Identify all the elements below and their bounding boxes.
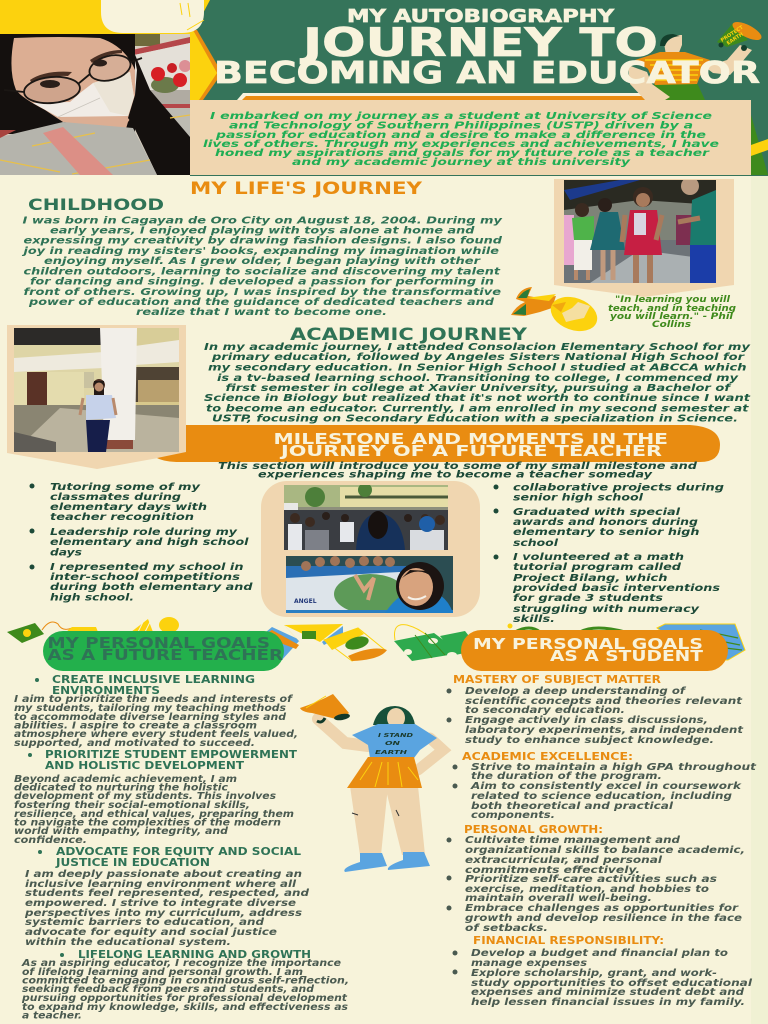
intro panel: passion for education and a desire to make a difference in the [215, 130, 706, 141]
illustration: woman with megaphone [300, 694, 443, 872]
section: personal growth: exercise, meditation, and hobbies to [465, 884, 709, 895]
icon: cutlery [131, 617, 179, 633]
section: teacher goal 3: perspectives into my curriculum, address [24, 908, 302, 919]
section: personal growth: Cultivate time management and [465, 835, 681, 846]
intro panel [190, 100, 751, 175]
section: financial responsibility: Develop a budget and financial plan to [471, 948, 728, 959]
section: teacher goal 1: my students, tailoring my teaching methods [14, 703, 286, 714]
section: academic excellence [452, 750, 757, 821]
quote [608, 295, 737, 330]
photo frame: childhood [554, 177, 734, 297]
title: becoming an educator: BECOMING AN EDUCATOR [214, 56, 760, 91]
section: academic excellence: ACADEMIC EXCELLENCE: [462, 750, 633, 763]
section: mastery of subject matter: Develop a deep understanding of [465, 686, 687, 697]
photo: student crowd [284, 483, 448, 550]
illustration: man with megaphone [628, 18, 764, 100]
section: teacher goal 4: committed to engaging in continuous self-reflection, [22, 976, 349, 986]
list: milestones right: provided basic interventions [512, 583, 720, 594]
panel: goals as a future teacher heading: MY PERSONAL GOALS [48, 634, 270, 652]
section: financial responsibility [452, 934, 753, 1008]
intro panel: I embarked on my journey as a student at University of Science [210, 111, 712, 122]
quote: you will learn." - Phil [610, 312, 734, 322]
quote: Collins [652, 320, 692, 330]
heading: my life's journey: MY LIFE'S JOURNEY [190, 179, 423, 199]
text block: academic journey: to become an educator. Currently, I am enrolled in my second semester at [206, 404, 750, 414]
banner: milestones [157, 425, 720, 462]
banner: milestones: JOURNEY OF A FUTURE TEACHER [280, 442, 663, 460]
section: teacher goal 2: PRIORITIZE STUDENT EMPOWERMENT [45, 748, 298, 761]
section: teacher goal 2: fostering their social-emotional skills, [14, 800, 250, 811]
illustration: woman with megaphone: ON [385, 741, 401, 747]
section: academic excellence: both theoretical and practical [471, 801, 674, 812]
section: teacher goal 3: I am deeply passionate about creating an [25, 869, 302, 880]
list: milestones left [30, 482, 254, 604]
text block: childhood: I was born in Cagayan de Oro City on August 18, 2004. During my [22, 216, 503, 226]
section: personal growth: growth and develop resilience in the face [465, 913, 742, 924]
section: teacher goal 4: to expand my knowledge, skills, and effectiveness as [22, 1002, 348, 1013]
section: teacher goal 3: advocate for equity and social justice [25, 927, 277, 938]
list: milestones right: Graduated with special [513, 507, 681, 518]
heading: academic journey: ACADEMIC JOURNEY [290, 325, 528, 345]
icon: open package [284, 624, 343, 645]
icon: green tote bags [394, 624, 625, 661]
section: mastery of subject matter: MASTERY OF SUBJECT MATTER [453, 673, 662, 686]
section: teacher goal 3: students feel represented, respected, and [25, 888, 310, 899]
quote: "In learning you will [615, 295, 731, 305]
list: milestones left: classmates during [50, 492, 181, 503]
intro panel: and Technology of Southern Philippines (USTP) driven by a [229, 120, 693, 132]
text block: childhood: enjoying myself. As I grew older, I began playing with other [44, 256, 481, 267]
section: teacher goal 2: resilience, and ethical values, preparing them [14, 809, 294, 820]
section: personal growth: organizational skills to balance academic, [465, 845, 745, 856]
panel: goals as a student heading: MY PERSONAL GOALS [473, 635, 703, 653]
section: financial responsibility: expenses and minimize student debt and [471, 987, 745, 998]
section: personal growth: Embrace challenges as opportunities for [465, 903, 739, 914]
list: milestones left: elementary and high school [50, 537, 249, 548]
text block: childhood [21, 216, 503, 318]
section: teacher goal 4: pursuing opportunities for professional development [21, 993, 348, 1004]
intro panel: and my academic journey at this university [292, 157, 631, 168]
panel: goals as a future teacher heading [43, 631, 284, 671]
text block: childhood: expressing my creativity by drawing fashion designs. I also found [24, 236, 503, 246]
section: teacher goal 2 [14, 748, 298, 846]
list: milestones right: skills. [513, 614, 555, 625]
section: teacher goal 4: seeking feedback from peers and students, and [22, 984, 315, 995]
list: milestones right [494, 482, 724, 625]
photo frame: academic [7, 325, 186, 469]
section: personal growth [446, 823, 745, 934]
section: mastery of subject matter [446, 673, 744, 746]
list: milestones left: Leadership role during my [50, 527, 238, 538]
section: financial responsibility: study opportunities to offset educational [471, 978, 753, 989]
section: personal growth: Prioritize self-care activities such as [465, 874, 717, 885]
section: teacher goal 2: world with empathy, integrity, and [14, 826, 229, 837]
right edge accent [751, 115, 768, 1024]
section: mastery of subject matter: Engage actively in class discussions, [465, 715, 708, 726]
section: mastery of subject matter: to secondary education. [465, 705, 625, 716]
photo: selfie [0, 34, 191, 175]
section: teacher goal 3: inclusive learning environment where all [25, 879, 297, 890]
section: mastery of subject matter: scientific concepts and theories relevant [465, 696, 743, 707]
section: teacher goal 1 [14, 673, 298, 749]
text block: milestones intro: experiences shaping me to become a teacher someday [258, 470, 653, 480]
list: milestones right: Project Bilang, which [513, 573, 668, 584]
section: personal growth: commitments effectively. [465, 865, 640, 876]
header banner [0, 0, 768, 176]
text block: academic journey [204, 342, 752, 424]
illustration: man with megaphone: PROTECT [720, 24, 745, 44]
section: teacher goal 3: ADVOCATE FOR EQUITY AND SOCIAL [56, 845, 301, 858]
section: financial responsibility: FINANCIAL RESPONSIBILITY: [473, 934, 664, 947]
section: teacher goal 1: I aim to prioritize the needs and interests of [14, 694, 294, 705]
section: teacher goal 3: within the educational system. [25, 937, 231, 948]
text block: childhood: power of education and the guidance of dedicated teachers and [28, 297, 495, 308]
section: teacher goal 2: AND HOLISTIC DEVELOPMENT [45, 759, 245, 772]
list: milestones right: elementary to senior high [513, 527, 700, 538]
list: milestones right: collaborative projects during [513, 482, 724, 494]
section: personal growth: of setbacks. [465, 923, 548, 934]
title: journey to: JOURNEY TO [299, 21, 658, 66]
section: financial responsibility: manage expenses [471, 958, 587, 969]
section: teacher goal 1: atmosphere where every student feels valued, [14, 729, 298, 740]
intro panel: lives of others. Through my experiences and achievements, I have [203, 139, 719, 150]
illustration: man with megaphone: EARTH [726, 32, 745, 47]
list: milestones right: awards and honors during [513, 517, 698, 528]
section: personal growth: maintain overall well-being. [465, 893, 652, 904]
section: teacher goal 3: JUSTICE IN EDUCATION [55, 856, 210, 869]
section: mastery of subject matter: laboratory experiments, and independent [465, 725, 744, 736]
section: mastery of subject matter: study to enhance subject knowledge. [465, 735, 714, 746]
list: milestones right: school [513, 538, 559, 549]
section: teacher goal 2: dedicated to nurturing the holistic [14, 782, 228, 794]
list: milestones left: teacher recognition [50, 512, 194, 523]
list: milestones right: senior high school [513, 492, 644, 504]
section: academic excellence: Strive to maintain a high GPA throughout [471, 762, 757, 773]
illustration: woman with megaphone: I STAND [378, 733, 414, 739]
panel: milestone photos [261, 481, 480, 617]
intro panel: honed my aspirations and goals for my future role as a teacher [215, 148, 710, 159]
icon: book left [260, 627, 300, 661]
section: teacher goal 2: Beyond academic achievement, I am [14, 774, 237, 785]
section: academic excellence: Aim to consistently excel in coursework [470, 781, 743, 792]
section: teacher goal 1: ENVIRONMENTS [52, 684, 160, 697]
panel: goals as a future teacher heading: AS A FUTURE TEACHER [48, 646, 284, 664]
text block: milestones intro: This section will introduce you to some of my small milestone and [218, 461, 698, 472]
panel: goals as a student heading [461, 630, 728, 671]
section: teacher goal 3: empowered. I strive to integrate diverse [25, 898, 296, 909]
text block: academic journey: Science in Biology but realized that it's not worth to continue since I want [204, 393, 752, 404]
section: academic excellence: the duration of the program. [471, 771, 662, 782]
text block: childhood: joy in reading my sisters' books, expanding my imagination while [21, 246, 499, 257]
section: teacher goal 4: As an aspiring educator, I recognize the importance [21, 958, 341, 969]
list: milestones left: Tutoring some of my [50, 482, 201, 493]
text block: academic journey: primary education, followed by Angeles Sisters National High School for [211, 352, 745, 363]
section: teacher goal 2: to navigate the complexities of the modern [14, 818, 281, 828]
section: academic excellence: related to science education, including [471, 791, 732, 802]
text block: academic journey: is a tv-based learning school. Transitioning to college, I commenced my [217, 373, 739, 384]
text block: academic journey: USTP, focusing on Secondary Education with a specialization in Science. [212, 414, 738, 424]
section: teacher goal 4 [21, 948, 349, 1022]
text block: childhood: for dancing and singing. I developed a passion for performing in [30, 276, 494, 288]
heading: childhood: CHILDHOOD [28, 195, 164, 214]
list: milestones left: inter-school competitions [50, 572, 240, 583]
section: academic excellence: components. [471, 810, 555, 821]
quote: teach, and in teaching [608, 304, 737, 314]
photo: group selfie: ANGEL [294, 598, 317, 605]
section: teacher goal 1: abilities. I aspire to create a classroom [14, 720, 257, 732]
section: financial responsibility: help lessen financial issues in my family. [471, 997, 745, 1008]
list: milestones left: high school. [50, 592, 134, 604]
text block: childhood: children outdoors, learning to socialize and discovering my talent [24, 266, 502, 278]
icon: bird and egg [511, 287, 602, 337]
title: my autobiography: MY AUTOBIOGRAPHY [347, 6, 615, 27]
section: teacher goal 4: a teacher. [22, 1010, 82, 1022]
section: teacher goal 3 [24, 845, 310, 948]
illustration: woman with megaphone: EARTH [375, 750, 408, 756]
section: teacher goal 4: LIFELONG LEARNING AND GROWTH [78, 948, 311, 961]
list: milestones left: elementary days with [50, 502, 207, 513]
text block: academic journey: my secondary education. In Senior High School I studied at ABCCA which [208, 362, 746, 374]
list: milestones right: struggling with numeracy [513, 604, 700, 615]
section: teacher goal 2: development of my students. This involves [14, 791, 276, 802]
section: teacher goal 3: systemic barriers to education, and [25, 917, 265, 928]
list: milestones right: tutorial program called [513, 562, 682, 573]
section: teacher goal 1: to accommodate diverse learning styles and [14, 712, 287, 723]
section: teacher goal 1: supported, and motivated to succeed. [14, 738, 255, 749]
decorative school supplies [7, 617, 745, 661]
list: milestones right: for grade 3 students [513, 593, 663, 604]
section: personal growth: extracurricular, and personal [465, 855, 663, 866]
text block: childhood: realize that I want to become one. [136, 307, 387, 318]
icon: green tag [7, 622, 98, 643]
text block: milestones intro [218, 461, 698, 480]
text block: childhood: early years, I enjoyed playing with toys alone at home and [50, 226, 476, 236]
photo: group selfie [286, 556, 453, 614]
section: teacher goal 2: confidence. [14, 835, 87, 846]
icon: tilted cup [324, 628, 387, 661]
header titles [214, 6, 760, 91]
text block: childhood: front of others. Growing up, I was inspired by the transformative [24, 287, 501, 298]
list: milestones left: days [50, 548, 82, 558]
text block: academic journey: first semester in college at Xavier University, pursuing a Bachelor of [226, 383, 732, 394]
list: milestones left: I represented my school in [50, 562, 244, 573]
section: financial responsibility: Explore scholarship, grant, and work- [471, 968, 717, 979]
list: milestones right: I volunteered at a math [513, 552, 684, 563]
section: personal growth: PERSONAL GROWTH: [464, 823, 603, 836]
icon: book right [657, 624, 745, 660]
list: milestones left: during both elementary and [50, 582, 254, 593]
panel: goals as a student heading: AS A STUDENT [550, 647, 704, 665]
section: teacher goal 1: CREATE INCLUSIVE LEARNING [52, 673, 255, 686]
text block: academic journey: In my academic journey, I attended Consolacion Elementary School for my [204, 342, 751, 353]
banner: milestones: MILESTONE AND MOMENTS IN THE [274, 430, 668, 448]
section: teacher goal 4: of lifelong learning and personal growth. I am [22, 967, 303, 978]
